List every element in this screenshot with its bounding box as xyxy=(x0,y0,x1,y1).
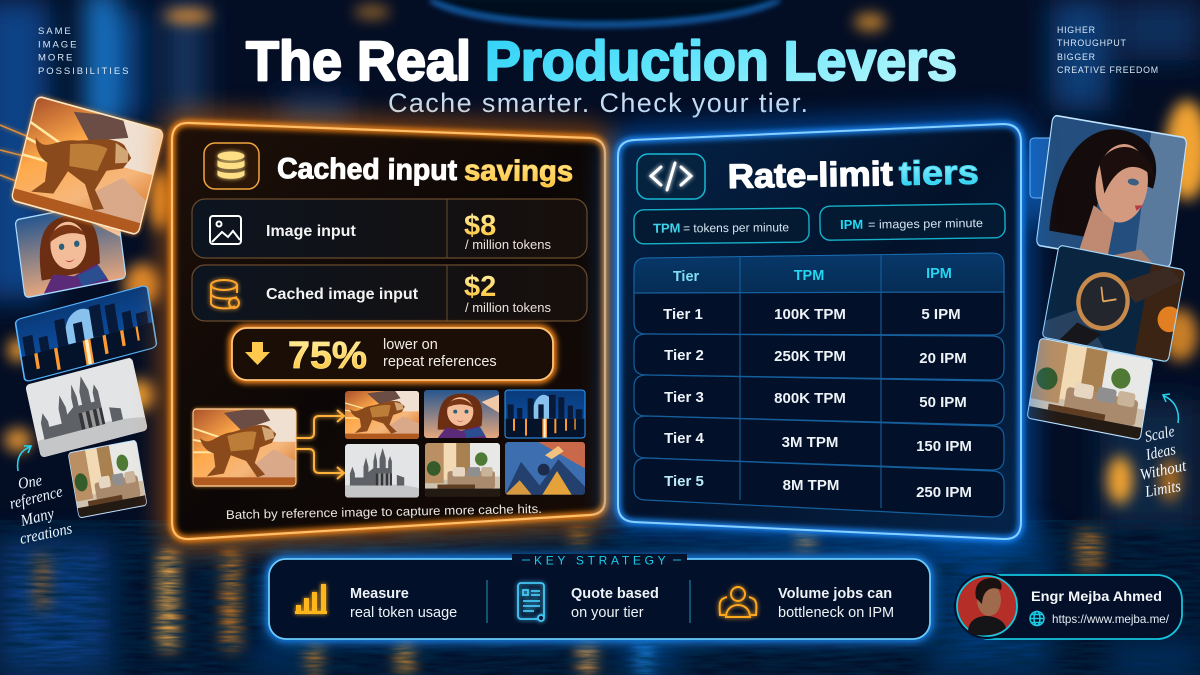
text: measure: real token usage xyxy=(350,605,457,621)
icon: people xyxy=(720,587,756,617)
icon: globe xyxy=(1030,612,1044,626)
icon: document xyxy=(518,583,544,621)
table header xyxy=(634,253,1004,293)
image: city xyxy=(15,285,157,382)
heading: cached input savings xyxy=(277,153,573,188)
table: rate-limit tiers: 800K TPM xyxy=(774,390,846,407)
table: rate-limit tiers: Tier xyxy=(673,269,700,285)
handwritten note: scale ideas: Without xyxy=(1138,457,1188,484)
table: rate-limit tiers: 20 IPM xyxy=(919,350,967,367)
top arc glow xyxy=(430,0,780,26)
callout: 75 percent lower: 75% xyxy=(288,335,367,377)
row: image input price: / million tokens xyxy=(465,237,551,252)
table: rate-limit tiers: 250 IPM xyxy=(916,484,972,501)
image thumb 4 xyxy=(345,444,419,498)
image: woman portrait xyxy=(1036,115,1187,268)
title xyxy=(246,29,957,92)
arrow: curved xyxy=(1163,394,1178,423)
row: image input price xyxy=(192,199,587,258)
left image stack xyxy=(0,93,165,518)
handwritten note: one reference: One xyxy=(17,472,43,493)
heading: cached input savings: Cached input xyxy=(277,153,458,187)
row: image input price: $8 xyxy=(464,210,496,242)
top-left tagline xyxy=(38,26,130,77)
text: author name: Engr Mejba Ahmed xyxy=(1031,588,1162,604)
handwritten note: one reference: Many xyxy=(18,505,57,530)
image thumb 1 xyxy=(345,390,419,439)
text: measure xyxy=(350,586,457,621)
text: volume jobs: Volume jobs can xyxy=(778,586,892,602)
caption: batch by reference: Batch by reference image to capture more cache hits. xyxy=(226,502,542,522)
table: rate-limit tiers: TPM xyxy=(794,268,824,284)
table: rate-limit tiers xyxy=(634,253,1004,517)
image: living room xyxy=(68,440,147,518)
heading: cached input savings: savings xyxy=(464,155,573,188)
panel: key strategy xyxy=(269,554,930,639)
table: rate-limit tiers: 150 IPM xyxy=(916,438,972,455)
top-left tagline: IMAGE xyxy=(38,40,78,50)
legend: TPM: TPM xyxy=(653,220,681,236)
icon: cached database xyxy=(211,280,239,308)
top-right tagline: BIGGER xyxy=(1057,52,1096,62)
legend: TPM xyxy=(634,208,809,244)
table: rate-limit tiers: Tier 5 xyxy=(664,473,704,490)
right image stack xyxy=(1027,115,1190,440)
handwritten note: scale ideas: Limits xyxy=(1143,478,1182,501)
legend: TPM: = tokens per minute xyxy=(683,220,789,235)
table: rate-limit tiers: IPM xyxy=(926,266,952,282)
table: rate-limit tiers: 50 IPM xyxy=(919,394,967,411)
icon: database badge xyxy=(204,143,259,189)
author badge xyxy=(954,573,1182,639)
image thumb 3 xyxy=(505,390,585,438)
title: The Real xyxy=(246,29,471,92)
table: rate-limit tiers: 8M TPM xyxy=(783,477,839,494)
callout: 75 percent lower: lower on xyxy=(383,337,438,353)
heading: rate-limit tiers: Rate-limit xyxy=(727,155,893,196)
text: url: https://www.mejba.me/ xyxy=(1052,612,1170,626)
row: cached image input price: / million tokens xyxy=(465,300,551,315)
legend: IPM xyxy=(820,204,1005,240)
row: cached image input price: $2 xyxy=(464,271,496,303)
heading: rate-limit tiers: tiers xyxy=(898,154,979,193)
table: rate-limit tiers: 250K TPM xyxy=(774,348,846,365)
table: rate-limit tiers: 5 IPM xyxy=(921,306,961,323)
title: Production Levers xyxy=(485,29,957,92)
legend: IPM: IPM xyxy=(840,217,863,232)
handwritten note: scale ideas xyxy=(1138,394,1188,501)
arrow: curved up xyxy=(18,446,31,471)
image: cheetah xyxy=(11,93,165,235)
table: rate-limit tiers: Tier 4 xyxy=(664,430,705,447)
table: rate-limit tiers: Tier 3 xyxy=(664,389,704,406)
icon: image xyxy=(210,216,241,244)
image thumb 2 xyxy=(424,390,499,438)
arrows: branching xyxy=(296,410,344,479)
text: quote based: on your tier xyxy=(571,605,644,621)
icon: bar chart xyxy=(295,584,327,614)
icon: code badge xyxy=(637,154,705,199)
top-left tagline: SAME xyxy=(38,26,73,37)
image thumb 6 xyxy=(505,442,585,495)
text: measure: Measure xyxy=(350,586,409,602)
table: rate-limit tiers: Tier 1 xyxy=(663,306,703,323)
text: quote based: Quote based xyxy=(571,586,659,602)
avatar xyxy=(954,573,1020,639)
text: quote based xyxy=(571,586,659,621)
image thumb 5 xyxy=(425,443,500,497)
handwritten note: scale ideas: Ideas xyxy=(1143,441,1177,464)
image: small backdrop xyxy=(1030,138,1058,198)
label: key strategy: KEY STRATEGY xyxy=(534,554,669,568)
panel: cached input savings xyxy=(172,123,605,539)
text: volume jobs xyxy=(778,586,894,621)
handwritten note: one reference xyxy=(8,446,74,548)
top-right tagline: HIGHER xyxy=(1057,25,1096,35)
row: image input price: Image input xyxy=(266,223,356,240)
table: rate-limit tiers: Tier 2 xyxy=(664,347,704,364)
diagram: one reference to many images xyxy=(193,390,585,498)
top-left tagline: POSSIBILITIES xyxy=(38,66,130,77)
top-right tagline: THROUGHPUT xyxy=(1057,38,1127,48)
handwritten note: one reference: creations xyxy=(18,520,74,548)
table rows xyxy=(634,292,1004,517)
floor xyxy=(0,535,1200,675)
top-right tagline: CREATIVE FREEDOM xyxy=(1057,65,1159,75)
table: rate-limit tiers: 3M TPM xyxy=(782,434,838,451)
callout: 75 percent lower: repeat references xyxy=(383,354,497,370)
image: main reference xyxy=(193,407,296,486)
image: watch xyxy=(1042,245,1190,363)
icon: down arrow xyxy=(245,342,270,365)
callout: 75 percent lower xyxy=(232,328,553,380)
top-left tagline: MORE xyxy=(38,52,74,64)
table: rate-limit tiers: 100K TPM xyxy=(774,306,846,323)
image: room xyxy=(1027,338,1153,440)
row: cached image input price: Cached image input xyxy=(266,286,419,303)
image: cathedral sketch xyxy=(25,357,148,458)
image: portrait xyxy=(15,200,126,298)
top-right tagline xyxy=(1057,25,1159,75)
handwritten note: one reference: reference xyxy=(8,483,64,513)
handwritten note: scale ideas: Scale xyxy=(1143,423,1176,446)
subtitle: Cache smarter. Check your tier. xyxy=(388,88,808,118)
legend: IPM: = images per minute xyxy=(868,216,983,232)
text: volume jobs: bottleneck on IPM xyxy=(778,605,894,621)
panel: rate-limit tiers xyxy=(618,124,1021,539)
row: cached image input price xyxy=(192,265,587,321)
heading: rate-limit tiers xyxy=(727,154,979,196)
